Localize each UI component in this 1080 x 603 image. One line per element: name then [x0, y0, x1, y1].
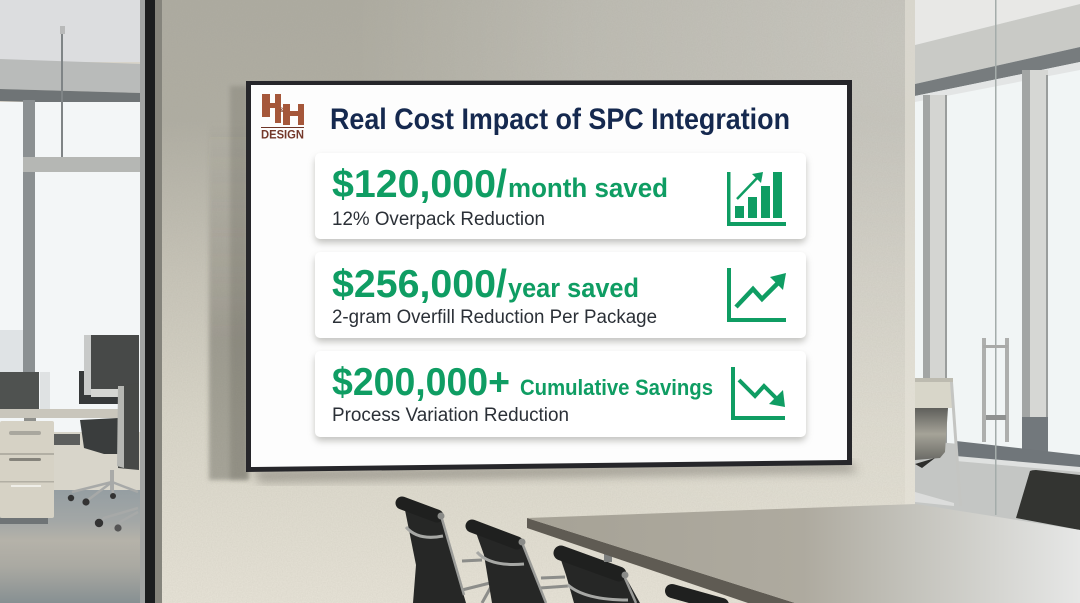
icon: falling line chart — [731, 367, 785, 420]
icon: rising bar chart — [727, 172, 786, 226]
screen shadow on wall — [209, 86, 858, 482]
right office room seen through glass — [915, 0, 1080, 603]
card 2: yearly savings: $256,000/ — [332, 263, 507, 306]
chair 3 — [560, 553, 640, 603]
chair 2 — [472, 526, 568, 603]
chair 1 — [402, 503, 492, 603]
glass door handle — [982, 338, 1009, 442]
card 2: yearly savings — [315, 252, 806, 342]
meeting chairs — [402, 503, 722, 603]
card 1: monthly savings: 12% Overpack Reduction — [332, 209, 545, 230]
right room side chair — [915, 378, 962, 506]
conference table — [527, 504, 1080, 603]
left office room seen through glass — [0, 0, 142, 603]
card 3: cumulative savings: Process Variation Reduction — [332, 405, 569, 426]
right room dark chair — [1016, 470, 1080, 530]
card 1: monthly savings — [315, 153, 806, 243]
right wall edge — [905, 0, 915, 505]
card 2: yearly savings: 2-gram Overfill Reduction Per Package — [332, 307, 657, 328]
icon: rising line chart — [727, 268, 786, 322]
white screen surface — [251, 85, 847, 467]
card 3: cumulative savings — [315, 351, 806, 441]
logo: H&H Design — [261, 94, 304, 142]
screen frame — [246, 80, 852, 472]
card 3: cumulative savings: $200,000+ — [332, 361, 510, 404]
chair 4 — [672, 591, 722, 603]
left door frame — [140, 0, 162, 603]
wall — [155, 0, 920, 603]
card 3: cumulative savings: Cumulative Savings — [520, 375, 713, 400]
card 1: monthly savings: $120,000/ — [332, 163, 507, 206]
card 1: monthly savings: month saved — [508, 173, 668, 203]
infographic panel — [251, 85, 847, 467]
logo: H&H Design: DESIGN — [261, 130, 304, 142]
left desk — [0, 409, 119, 524]
left monitors — [0, 335, 139, 409]
title: Real Cost Impact of SPC Integration — [330, 103, 790, 136]
left office chair — [68, 383, 139, 532]
logo: H&H Design: & — [280, 108, 284, 114]
card 2: yearly savings: year saved — [508, 273, 639, 303]
